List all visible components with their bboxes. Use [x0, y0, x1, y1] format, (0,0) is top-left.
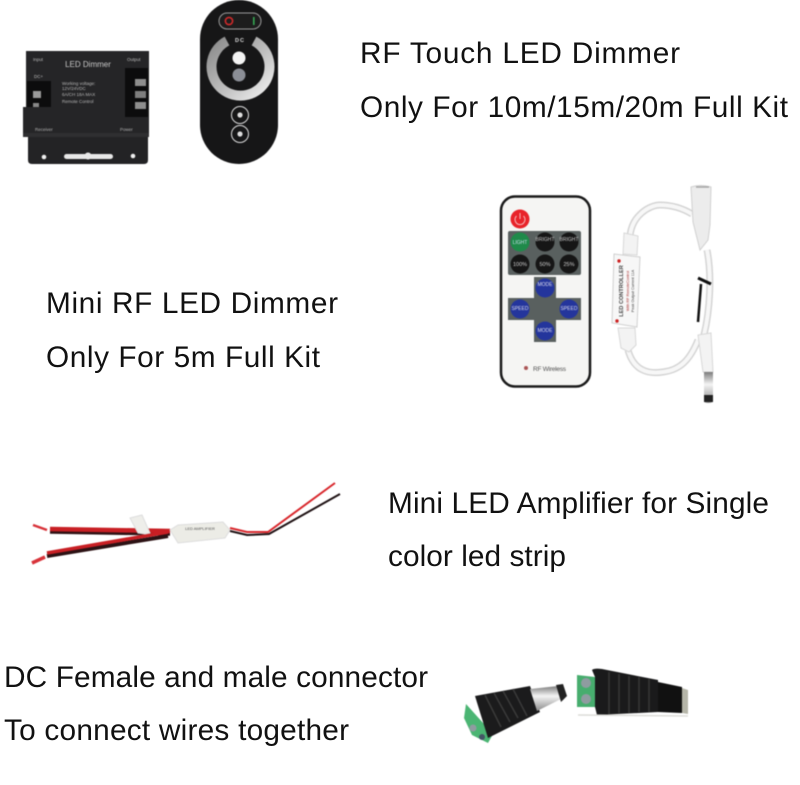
icon: mini LED controller cable	[612, 186, 713, 403]
icon: mini LED controller cable: With RF RemoteControl	[626, 271, 630, 311]
icon: LED dimmer box: Output	[127, 57, 141, 62]
icon: mini RF remote: MODE	[538, 328, 553, 334]
icon: LED dimmer box: Power	[120, 127, 133, 132]
icon: mini LED controller cable: LED CONTROLLER	[619, 265, 625, 317]
title: mini RF dimmer text	[46, 287, 338, 374]
title: DC connector text: DC Female and male connector	[4, 661, 428, 694]
icon: RF touch remote: DC	[235, 38, 245, 44]
icon: LED dimmer box: Remote Control	[62, 99, 94, 104]
title: mini amplifier text	[388, 487, 769, 573]
icon: LED dimmer box: DC+	[34, 74, 43, 79]
icon: mini RF remote: 25%	[563, 262, 575, 268]
icon: mini RF remote: BRIGHT	[536, 237, 554, 243]
icon: LED dimmer box: 12V/24VDC	[62, 86, 87, 91]
icon: LED amplifier with red and black wires	[32, 483, 340, 563]
icon: mini RF remote	[501, 196, 590, 386]
icon: LED dimmer box: Working voltage:	[62, 81, 95, 86]
icon: mini RF remote: RF Wireless	[533, 366, 567, 373]
icon: mini RF remote: MODE	[538, 282, 553, 288]
title: mini RF dimmer text: Mini RF LED Dimmer	[46, 287, 338, 320]
icon: LED dimmer box	[23, 51, 149, 164]
icon: mini RF remote: BRIGHT	[560, 237, 578, 243]
icon: female DC connector	[577, 669, 688, 716]
icon: mini LED controller cable: Peak Output Current 11A	[631, 269, 635, 312]
title: RF touch dimmer text: Only For 10m/15m/20m Full Kit	[360, 91, 789, 124]
icon: mini RF remote: 100%	[513, 262, 527, 268]
title: mini amplifier text: color led strip	[388, 540, 566, 573]
icon: LED dimmer box: Receiver	[35, 127, 53, 132]
icon: LED dimmer box: Input	[33, 57, 44, 62]
title: RF touch dimmer text	[360, 37, 789, 124]
title: DC connector text	[4, 661, 428, 747]
icon: mini RF remote: SPEED	[561, 306, 578, 312]
icon: male DC connector	[464, 684, 567, 743]
title: mini RF dimmer text: Only For 5m Full Kit	[46, 341, 321, 374]
title: RF touch dimmer text: RF Touch LED Dimmer	[360, 37, 680, 70]
icon: LED dimmer box: LED Dimmer	[65, 60, 111, 69]
icon: LED dimmer box: 6A/CH 18A MAX	[62, 92, 95, 97]
icon: LED amplifier with red and black wires: LED AMPLIFIER	[185, 526, 215, 531]
icon: mini RF remote: SPEED	[512, 306, 529, 312]
title: DC connector text: To connect wires together	[4, 714, 349, 747]
icon: mini RF remote: 50%	[539, 262, 551, 268]
icon: RF touch remote	[200, 0, 278, 164]
icon: mini RF remote: LIGHT	[513, 240, 527, 246]
title: mini amplifier text: Mini LED Amplifier for Single	[388, 487, 769, 520]
